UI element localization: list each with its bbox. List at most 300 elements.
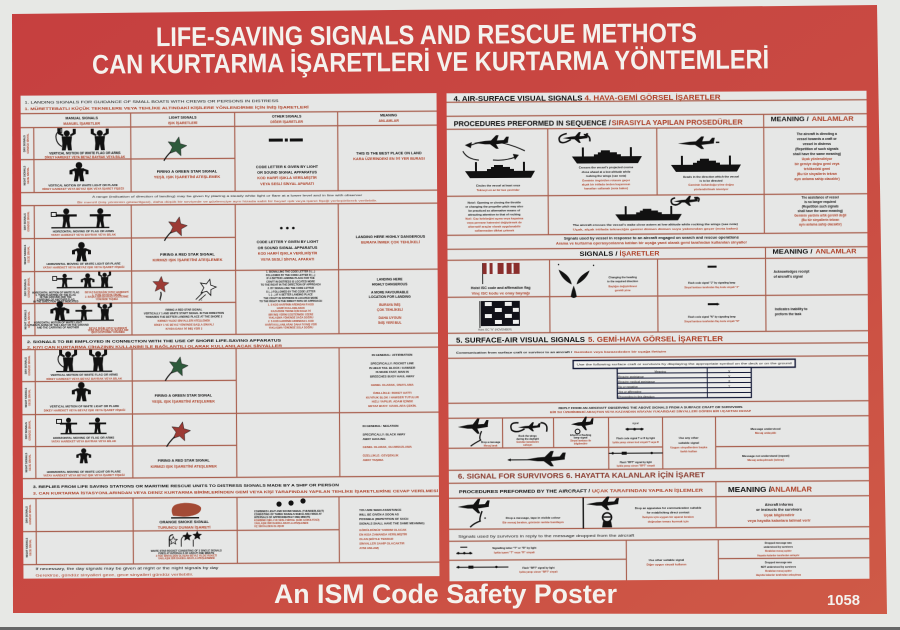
text: hoist ISC code: Vinç ISC kodu ve onay bayrağı	[472, 290, 530, 296]
panel: left landing and rescue signals	[21, 93, 439, 579]
symbol table: No or negative	[618, 384, 638, 389]
text: assistance not required: is no longer required	[804, 200, 836, 204]
icon: drop a message plane	[458, 418, 489, 446]
text: crosses wake astern	[573, 222, 738, 231]
text: crosses projected course: close ahead at a low altitude while	[582, 169, 631, 174]
text: hoist ISC code	[471, 286, 531, 296]
text: circles the vessel	[476, 183, 521, 192]
icon: plane heading direction	[671, 136, 741, 172]
text: range note: Bir menzil (iniş yönünün gösterilgesi), daha düşük bir seviyede ve gözlemciye aynı hizada sabit bir beyaz ışık veya işaret fişeği yerleştirilerek verilebilir.	[77, 198, 377, 204]
icon: red star and white star	[152, 275, 218, 302]
text: signals used by vessel: Arama ve kurtarma operasyonlarına katılan bir uçağa yanıt olarak gemi tarafından kullanılan sinyaller	[556, 240, 748, 246]
text: changing the heading: Changing the heading	[609, 275, 637, 279]
symbol table: Meaning	[654, 369, 666, 373]
row labels: day and night signals: GECE SİNYAL	[27, 167, 30, 184]
caption: flag in ground sequence: IN THE GROUND AND THE	[40, 296, 72, 299]
text: signalling T or R: Signalling letter "T" or "R" by light	[492, 546, 536, 550]
caption: apparatus vertical motion: DİKEY HAREKET VEYA BEYAZ BAYRAK VEYA BİLAK	[46, 376, 123, 381]
text: firing a red star signal: KIRMIZI IŞIK İŞARETİNİ ATEŞLEMEK	[153, 257, 223, 262]
text: heads in the direction: Geminin bulunduğu yöne doğru	[688, 183, 734, 187]
text: aircraft informs: Aircraft informs	[765, 503, 793, 507]
heading: meaning	[771, 117, 855, 123]
caption: flare on ground sequence: BEYAZ IŞIĞIN YATAY HAREKETİ	[89, 327, 127, 330]
row labels: day and night signals: GECE SİNYAL	[28, 311, 31, 328]
text: throttle note: Not!: Gaz kelebeğini açma veya kapatma	[465, 216, 524, 221]
text: white star rockets: FIRED AT INTERVALS OF ABOUT ONE MINUTE	[158, 552, 215, 555]
heading: section 1: 1. MÜRETTEBATLI KÜÇÜK TEKNELERE VEYA TEHLİKE ALTINDAKİ KİŞİLERE YÖNLENDİRME İÇİN İNİŞ İŞARETLERİ	[25, 104, 309, 111]
text: throttle note: sallanmadan dikkat çekmek	[475, 228, 514, 233]
text: meaning directing a vessel: vessel towards a craft or	[797, 137, 837, 141]
column headings: left table: LIGHT SIGNALS	[169, 116, 197, 120]
text: firing a red star signal: FIRING A RED STAR SIGNAL	[160, 251, 215, 257]
text: throttle note: alternatif araçlar olarak uygulanabilir	[468, 224, 521, 229]
icons: horizontal flag motion figures	[51, 208, 111, 261]
text: crosses projected course: Geminin öngörülen rotasını geçer	[582, 178, 631, 182]
text: assistance not required: shall have the same meaning)	[798, 209, 843, 213]
text: crosses wake astern: The aircraft crosses the vessel's wake close astern at low altitude while rocking the wings (see note)	[573, 222, 738, 227]
text: assistance not required: The assistance of vessel	[801, 195, 839, 200]
row labels: day and night signals: GECE SİNYAL	[27, 246, 31, 263]
symbol table	[573, 359, 795, 399]
text: flashing plane note: bilgilendirir	[574, 442, 587, 446]
icon: white star rockets	[169, 531, 202, 547]
text: code letter K: VEYA SESLİ SİNYAL APARATI	[260, 182, 314, 186]
icon: rocking wings plane	[511, 422, 547, 432]
heading: meaning 3	[728, 487, 812, 494]
text: drop an apparatus	[635, 506, 702, 523]
icon: T or R signal	[456, 547, 472, 554]
text: you are seen: SIGNALS SHALL HAVE THE SAME MEANING)	[359, 521, 425, 526]
text: firing a green star signal: YEŞİL IŞIK İŞARETİNİ ATEŞLEMEK	[154, 174, 220, 179]
row labels: day and night signals: GECE SİNYAL	[28, 389, 31, 406]
footer note: If necessary, the day signals may be given at night or the night signals by day	[35, 566, 219, 571]
text: you are seen: EN KISA ZAMANDA VERİLMİŞTİR	[359, 531, 408, 537]
text: negation meaning: AWAY TAŞIMA	[363, 458, 384, 462]
table grid: right panel	[447, 100, 869, 581]
text: drop a message: Mesaj bırak	[484, 444, 498, 447]
text: affirmation meaning	[366, 353, 420, 408]
caption: flare on ground sequence: YERE IŞIK KOYMA VE BAŞKA BİR	[88, 329, 129, 332]
icon: morse K	[269, 138, 303, 142]
symbol table: Use the following surface craft or survivors by displaying the appropriate symbol on the deck or on the ground	[577, 361, 792, 367]
text: code letters S R L: FOLLOWED BY THE CODE LETTER R (.-.)	[266, 274, 316, 277]
heading: section 1	[25, 98, 309, 111]
text: rock the wings: during the daylight	[516, 438, 539, 441]
text: flash N	[684, 316, 740, 323]
text: affirmation meaning: GENEL OLARAK, ONAYLAMA	[371, 383, 414, 387]
heading: section 5: 5. GEMİ-HAVA GÖRSEL İŞARETLER	[588, 334, 723, 344]
text: better location meaning: DAHA UYGUN	[378, 316, 402, 320]
text: aircraft informs: Uçak bilgilendirir	[764, 513, 795, 517]
text: affirmation meaning: ÖZELLİKLE: ROKET HATTI	[373, 390, 412, 395]
text: throttle note	[465, 200, 524, 233]
text: code letters S R L: THE CRAFT IN DISTRESS IS LOCATED MORE	[264, 297, 318, 300]
text: combined light and sound signal	[254, 510, 324, 528]
text: affirmation meaning: HIZLI YAPILIR. ADAM İÇİNDE	[372, 398, 413, 404]
text: drop a message	[503, 516, 564, 524]
footer title: An ISM Code Safety Poster	[274, 579, 617, 609]
text: negation meaning: IN GENERAL: NEGATION	[363, 424, 399, 428]
text: you are seen: AYNI ANLAM)	[359, 546, 379, 550]
text: you are seen: POSSIBLE (REPETITION OF SUCH	[359, 517, 408, 521]
text: throttle note: attracting attention to that of rocking	[468, 212, 521, 217]
text: code letter K	[256, 165, 319, 186]
text: use any other signal: farklı kullan	[680, 449, 697, 453]
caption: horizontal moving of light: YATAY HAREKET VEYA BEYAZ IŞIK VEYA İŞARET FİŞEĞİ	[43, 264, 125, 270]
text: flash RPT	[617, 461, 655, 468]
text: meaning directing a vessel: aynı anlama sahip olacaktır)	[794, 177, 840, 181]
text: better location meaning: ÇOK TEHLİKELİ	[377, 308, 403, 312]
caption: vertical motion of flag: DİKEY HAREKET VEYA BEYAZ BAYRAK VEYA BİLAK	[45, 155, 126, 159]
text: red and white star instructions: KIRMIZI YILDIZ SİNYALLERİ ATEŞLEMEK	[158, 319, 210, 323]
column headings: left table	[63, 113, 399, 126]
text: you are seen: GÖRÜLDÜNÜZ YARDIM OLACAK	[359, 527, 407, 532]
text: firing a green star signal	[154, 168, 220, 179]
text: range note	[77, 193, 377, 204]
heading: section 2: 2. SIGNALS TO BE EMPLOYED IN CONNECTION WITH THE USE OF SHORE LIFE-SAVING APPARATUS	[27, 337, 281, 344]
text: negation meaning: ÖZELLİKLE: GEVŞEKLİK	[363, 452, 399, 458]
text: code letters S R L: IF A BETTER LANDING PLACE FOR THE	[267, 277, 315, 280]
icon: flash J dash	[708, 266, 717, 268]
icons: apparatus day and night figures	[56, 350, 112, 401]
text: orange smoke signal: ORANGE SMOKE SIGNAL	[159, 519, 209, 524]
caption: flag in ground sequence: CARRYING OF ANOTHER FLAG	[37, 298, 75, 302]
row labels: day and night signals: DAY SIGNALS	[23, 135, 26, 152]
text: affirmation meaning: IS HELD TAIL BLOCK / HAWSER	[369, 366, 416, 370]
text: dropped message not understood: NOT understood by survivors	[761, 565, 797, 569]
icon: green star signal 2	[165, 355, 190, 381]
heading: procedures by aircraft: PROCEDURES PREFORMED BY THE AIRCRAFT /	[459, 488, 591, 495]
text: flash RPT	[519, 567, 558, 574]
text: you are seen: WILL BE GIVEN A SOON AS	[359, 512, 399, 517]
icons: flag in ground sequence	[53, 272, 113, 288]
heading: section 5: 5. SURFACE-AIR VISUAL SIGNALS	[456, 337, 585, 345]
row labels: day and night signals: DAY SIGNALS	[25, 357, 28, 374]
text: assistance not required: (Bu tür sinyallerin tekrarı	[801, 218, 839, 222]
text: better location meaning: LANDING HERE	[377, 277, 403, 281]
text: assistance not required	[794, 195, 846, 227]
text: affirmation meaning: KUYRUK BLOK / HAWSER TUTULUR	[366, 395, 420, 399]
icon: red star signal	[164, 215, 189, 241]
icon: flash T or R	[626, 422, 644, 431]
icon: flash T or R: signal	[632, 422, 639, 425]
text: aircraft informs: veya hayatta kalanlara talimat verir	[748, 519, 811, 523]
text: flashing plane note: Sinyal lambası ile	[570, 439, 592, 443]
icon: plane dropping apparatus	[586, 497, 619, 527]
text: firing green star 2: FIRING A GREEN STAR SIGNAL	[155, 393, 213, 398]
icons: flare on ground sequence	[50, 301, 114, 321]
text: orange smoke signal: TURUNCU DUMAN İŞARETİ	[158, 525, 211, 530]
caption: vertical motion of light	[42, 183, 124, 191]
text: combined light and sound signal: COMBINED LIGHT AND SOUND SIGNAL (THUNDERLIGHT)	[254, 510, 324, 513]
text: better location meaning: BURAYA İNİŞ	[379, 303, 401, 307]
text: better location meaning: A MORE FAVOURABLE	[371, 290, 409, 295]
icon: morse Y dots	[280, 227, 295, 229]
text: you are seen	[359, 508, 425, 550]
text: red and white star instructions: VERTICALLY 1 AND WHITE START SIGNAL IN THE DIRECTION	[144, 311, 224, 315]
text: firing red star 2: FIRING A RED STAR SIGNAL	[158, 459, 210, 463]
row labels: day and night signals: NIGHT SIGNALS	[24, 245, 27, 264]
icon: flash RPT	[609, 451, 663, 455]
text: firing red star 2: KIRMIZI IŞIK İŞARETİNİ ATEŞLEMEK	[151, 464, 217, 469]
row labels: day and night signals: DAY SIGNALS	[25, 422, 28, 439]
text: changing the heading: gerekli yöne	[615, 288, 631, 292]
heading: meaning 2	[772, 249, 857, 256]
photo bottom edge shadow	[0, 627, 900, 630]
icon: orange smoke	[171, 503, 201, 519]
icon: november flag	[480, 301, 520, 328]
caption: horizontal moving of light: HORIZONTAL MOVING OF WHITE LIGHT OR PLARE	[47, 261, 121, 266]
text: code letters S R L: KAZAZEDE TEKNE İÇİN DAHA İYİ	[271, 310, 311, 313]
text: code letters S R L: L (.-..) IF A BETTER LANDING PLACE	[269, 293, 313, 297]
text: code letter Y: KOD HARFİ IŞIKLA VERİLMİŞTİR	[258, 251, 318, 256]
text: drop a message: Drop a message, tape in visible colour	[506, 516, 561, 520]
text: affirmation meaning: BREECHES BUOY HAUL AWAY	[370, 374, 415, 379]
text: throttle note: or changing the propeller pitch may also	[465, 204, 523, 209]
text: use any other signal: Uygun sinyallerden başka	[670, 445, 708, 449]
text: assistance not required: Geminin yardımı artık gerekli değil	[794, 213, 846, 218]
caption: apparatus vertical motion: VERTICAL MOTION OF WHITE LIGHT OR PLARE	[50, 404, 119, 408]
icon: red star and white star: 2	[201, 299, 203, 302]
text: code letters S R L: HARFİ KULLANILARAK	[277, 307, 305, 310]
icon: red star and white star: 1	[160, 299, 162, 302]
text: white star rockets	[151, 549, 222, 560]
text: throttle note: veya pervane hatvesini değiştirmek de	[467, 220, 522, 225]
text: hoist ISC code: Hoist ISC code and affirmation flag	[471, 286, 531, 290]
icon: plane crossing astern	[615, 196, 699, 221]
text: drop a message: Bir mesaj bırakın, görünür renkte bantlayın	[503, 520, 564, 524]
text: message understood	[751, 427, 781, 435]
text: flash RPT: Işıkla yanıp sönen "RPT" sinyali	[617, 464, 655, 468]
text: white star rockets: 3 TEK SİNYALDEN OLUŞAN BEYAZ YILDIZ ROKETİ	[156, 554, 217, 558]
symbol table: Require assistance	[618, 374, 644, 379]
icons: apparatus horizontal figures	[56, 418, 107, 463]
text: you are seen: SİNYALLER SAHİP OLACAKTIR	[359, 540, 405, 546]
text: reply from aircraft	[550, 405, 751, 414]
text: aircraft informs	[748, 503, 811, 523]
text: meaning directing a vessel: tehlikedeki gemi	[804, 167, 830, 171]
heading: section 4	[454, 93, 721, 103]
text: use any other signal: Use any other	[679, 436, 699, 440]
poster number: 1058	[827, 592, 860, 609]
text: communication from surface craft: Communication from surface craft or survivor to an aircraft /	[456, 350, 572, 355]
text: meaning directing a vessel: shall have the same meaning)	[793, 152, 841, 156]
heading: section 2	[27, 337, 282, 350]
heading: procedures	[454, 117, 743, 128]
text: code letters S R L: TO THE RIGHT IN THE DIRECT PATH OF APPROACH	[259, 300, 322, 303]
text: code letters S R L: CRAFT IN DISTRESS IS LOCATED MORE	[266, 280, 315, 284]
text: flashing plane note	[570, 434, 592, 446]
row labels: day and night signals: NIGHT SIGNALS	[26, 538, 29, 557]
text: use other suitable signal: Use other suitable signal	[649, 558, 684, 562]
text: code letter Y	[257, 240, 319, 262]
icon: plane crossing ahead	[559, 132, 642, 164]
text: flash J: Sinyal lambası tarafından flaş kodu sinyali "J"	[684, 286, 740, 289]
text: firing red star 2	[151, 458, 217, 469]
text: negation meaning: SPECIFICALLY: BLACK AWAY	[363, 432, 405, 437]
caption: apparatus horizontal motion: HORIZONTAL MOVING OF WHITE LIGHT OR PLARE	[47, 469, 121, 474]
text: best place on land	[353, 151, 425, 161]
text: code letters S R L: TO THE RIGHT IN THE DIRECTION OF APPROACH	[261, 284, 321, 287]
heading: section 3: 3. CAN KURTARMA İSTASYONLARINDAN VEYA DENİZ KURTARMA BİRİMLERİNDEN GEMİ VEYA KİŞİ TARAFINDAN YAPILAN TEHLİKE İŞARETLERİNE CEVAP VERİLMESİ	[33, 488, 438, 496]
icon: changing heading	[558, 264, 594, 298]
text: best place on land: THIS IS THE BEST PLACE ON LAND	[356, 151, 422, 156]
caption: horizontal moving of flag: YATAY HAREKET VEYA BAYRAK VEYA BİLAK	[51, 232, 117, 237]
text: meaning directing a vessel: The aircraft is directing a	[797, 132, 837, 136]
text: code letters S R L: HARFİ KULLANILARAK DAHA İYİ İNİŞ YERİ	[265, 323, 317, 326]
text: combined light and sound signal: YAKLAŞIK BİR DAKİKA ARAYLA ATEŞLENEN	[254, 522, 308, 525]
text: affirmation meaning: BEYAZ BUOY. UZAKLARA ÇEKİN.	[368, 403, 417, 408]
heading: signals: İŞARETLER	[619, 250, 660, 258]
text: message not understood	[742, 454, 789, 462]
heading: meaning: MEANING /	[771, 117, 809, 123]
symbol table: Proceeding in this direction	[618, 394, 655, 399]
text: highly dangerous: BURAYA İNMEK ÇOK TEHLİKELİ	[361, 240, 420, 245]
caption: flag in ground sequence: BEYAZ BAYRAĞIN YATAY HAREKETİ	[85, 291, 129, 294]
text: use other suitable signal: Diğer uygun sinyali kullanın	[646, 562, 686, 566]
text: heads in the direction: is to be directed	[700, 179, 723, 183]
text: flashing plane note: Inform or flashing	[570, 434, 592, 437]
row labels: day and night signals	[23, 133, 32, 557]
text: affirmation meaning: IS MADE FAST, MAN IN	[376, 370, 409, 374]
text: white star rockets: YAKLAŞIK BİR DAKİKA ARAYLA ATEŞLENMESİ	[158, 557, 215, 560]
text: rock the wings: Gündüz kanatlarını	[516, 441, 539, 444]
text: code letters S R L: 1. S KOD HARFİNİN ARDINDAN R KOD	[268, 303, 314, 307]
text: flash J	[684, 282, 740, 289]
title: CAN KURTARMA İŞARETLERİ VE KURTARMA YÖNTEMLERİ	[92, 44, 769, 80]
text: highly dangerous: LANDING HERE HIGHLY DANGEROUS	[356, 235, 426, 239]
row labels: day and night signals: NIGHT SIGNALS	[24, 310, 27, 329]
text: inability: preform the task	[775, 312, 802, 316]
text: better location meaning: HIGHLY DANGEROUS	[372, 282, 408, 287]
row labels: day and night signals: NIGHT SIGNALS	[23, 166, 27, 185]
heading: procedures: SIRASIYLA YAPILAN PROSEDÜRLER	[612, 117, 743, 127]
text: affirmation meaning: IN GENERAL: AFFIRMATION	[372, 353, 412, 357]
icon: plane dropping message	[458, 499, 490, 527]
text: code letter K: CODE LETTER K GIVEN BY LIGHT	[256, 165, 319, 169]
text: crosses projected course: Crosses the vessel's projected course	[579, 165, 634, 169]
symbol table: Yes or affirmative	[618, 389, 642, 394]
text: flashing plane note: lamp signal	[574, 436, 588, 440]
text: crosses wake astern: Uçak, alçak irtifada tekneciğin gemisi dümen dümen suyu yakınından geçer (nota bakın)	[573, 226, 738, 231]
text: use any other signal	[670, 436, 708, 453]
text: crosses projected course: rocking the wings (see note)	[586, 174, 626, 178]
text: message not understood: Message not understand (repeat)	[742, 454, 789, 458]
text: code letters S R L: YAKLAŞMA YÖNÜNDE SOLA DOĞRU	[269, 326, 313, 330]
heading: section 1: 1. LANDING SIGNALS FOR GUIDANCE OF SMALL BOATS WITH CREWS OR PERSONS IN DISTRESS	[25, 98, 279, 105]
text: firing a green star signal: FIRING A GREEN STAR SIGNAL	[157, 168, 218, 174]
text: code letters S R L: 2. BY SIGNALLING THE CODE LETTER	[268, 287, 314, 290]
text: drop an apparatus: İletişim için uygun bir aparat bırakın	[642, 514, 694, 519]
row labels: day and night signals: DAY SIGNALS	[24, 279, 27, 296]
text: acknowledges receipt: Acknowledges receipt	[774, 270, 810, 274]
symbol table: Y	[728, 384, 730, 388]
text: meaning directing a vessel: bir gemiye doğru gemi veya	[795, 162, 839, 166]
text: code letters S R L	[259, 270, 322, 330]
text: signalling T or R	[492, 546, 536, 555]
footer note: Gerekirse, gündüz sinyalleri gece, gece sinyalleri gündüz verilebilir.	[35, 573, 193, 578]
row labels: day and night signals: GECE SİNYAL	[29, 539, 32, 556]
text: red and white star instructions	[144, 307, 224, 331]
heading: section 4: 4. AIR-SURFACE VISUAL SIGNALS	[454, 95, 583, 103]
column headings: left table: DİĞER İŞARETLER	[270, 119, 303, 124]
text: inability	[775, 307, 807, 316]
text: communication from surface craft	[456, 349, 667, 355]
text: affirmation meaning: SPECIFICALLY: ROCKET LINE	[370, 361, 414, 366]
text: flash N: Flash code signal "N" by signaling lamp	[688, 316, 736, 319]
heading: section 5	[456, 334, 723, 345]
text: message understood: Message understood	[751, 427, 781, 431]
text: red and white star instructions: DİKEY 1 VE BEYAZ YÖNÜNDE BAŞLA SİNYALİ	[154, 322, 214, 327]
heading: procedures: PROCEDURES PREFORMED IN SEQUENCE /	[454, 120, 611, 128]
title	[92, 17, 769, 80]
text: better location meaning: İNİŞ YERİ BUL	[378, 321, 402, 325]
text: reply from aircraft: REPLY FROM AN AIRCRAFT OBSERVING THE ABOVE SIGNALS FROM A SURFACE CRAFT OR SURVIVORS	[558, 405, 743, 410]
text: you are seen: YOU ARE SEEN ASSISTANCE	[359, 508, 401, 512]
text: message not understood: Mesaj anlaşılmadı (tekrar)	[747, 458, 784, 462]
text: reply from aircraft: BİR SU ÜZERİNDEKİ ARAÇTAN VEYA KAZANDAN ARAYAN YUKARIDAKİ SİNYALLERİ GÖREN BİR UÇAKTAN CEVAP	[550, 409, 751, 414]
row labels: day and night signals: GÜNDÜZ SİNYAL	[28, 355, 31, 376]
caption: vertical motion of flag	[45, 151, 126, 159]
text: orange smoke signal	[158, 519, 211, 530]
symbol table: V	[728, 374, 730, 378]
text: meaning directing a vessel: (Repetition of such signals	[795, 147, 839, 151]
text: flash RPT: Flash "RPT" signal by light	[620, 461, 652, 464]
row labels: day and night signals: NIGHT SIGNALS	[25, 388, 28, 407]
text: throttle note: Note!: Opening or closing the throttle	[467, 200, 521, 205]
icon: red star signal 2	[167, 420, 192, 447]
text: message understood: Mesaj anlaşıldı	[755, 431, 776, 435]
title: LIFE-SAVING SIGNALS AND RESCUE METHOTS	[156, 18, 697, 52]
heading: signals	[579, 250, 660, 258]
text: flash T or R	[613, 437, 659, 444]
text: combined light and sound signal: ÜÇ SİNYALDEN OLUŞUR	[254, 525, 284, 528]
column headings: left table: OTHER SIGNALS	[272, 114, 302, 119]
text: signals used by survivors: Signals used by survivors in reply to the message dropped from the aircraft	[458, 534, 634, 539]
row labels: day and night signals: GÜNDÜZ SİNYAL	[28, 277, 31, 298]
text: acknowledges receipt	[774, 270, 810, 279]
icon: flashing plane	[571, 417, 594, 434]
caption: flag in ground sequence: 1. YERE BAYRAK DİKME	[92, 293, 122, 297]
text: rock the wings: Rock the wings	[518, 435, 537, 438]
text: signals used by vessel: Signals used by vessel in response to an aircraft engaged on search and rescue operations	[564, 236, 739, 241]
column headings: left table: ANLAMLAR	[378, 119, 399, 123]
caption: horizontal moving of flag	[51, 229, 117, 237]
text: combined light and sound signal: KOMBİNE IŞIKLI VE SESLİ SİNYAL (GÖK GÜRÜLTÜSÜ)	[254, 519, 320, 522]
text: highly dangerous	[356, 235, 426, 245]
icon: green star signal	[164, 135, 188, 161]
text: negation meaning: GENEL OLARAK, OLUMSUZLAMA	[363, 445, 413, 449]
caption: flare on ground sequence: 1. THEN PLACING OF THE LIGHT ON THE GROUND	[27, 324, 89, 327]
caption: apparatus vertical motion: DİKEY HAREKET VEYA BEYAZ IŞIK VEYA İŞARET FİŞEĞİ	[44, 407, 125, 413]
icon: windsock flag	[483, 263, 520, 284]
caption: flare on ground sequence: IŞIĞI GÖSTERME YÖNÜNDE	[91, 331, 125, 334]
text: flash RPT: Işıkla yanıp sönen "RPT" sinyali	[519, 571, 558, 574]
text: dropped message understood	[757, 542, 799, 557]
text: negation meaning	[363, 424, 413, 462]
column headings: left table: MEANING	[380, 113, 397, 117]
text: hoist november: Hoist ISC "N" (NOVEMBER)	[478, 327, 512, 332]
text: dropped message not understood	[756, 561, 802, 577]
text: heads in the direction	[683, 175, 739, 191]
text: dropped message not understood: Dropped message was	[765, 561, 793, 564]
icon: plane circling vessel	[463, 135, 535, 178]
caption: flag in ground sequence: 2. BAŞKA BİR BAYRAĞI GÖSTERME	[85, 296, 129, 299]
row labels: day and night signals: GECE SİNYAL	[29, 454, 32, 471]
text: negation meaning: AWAY HAULING	[363, 437, 386, 441]
row labels: day and night signals: GÜNDÜZ SİNYAL	[29, 504, 32, 525]
heading: section 3	[33, 482, 438, 496]
